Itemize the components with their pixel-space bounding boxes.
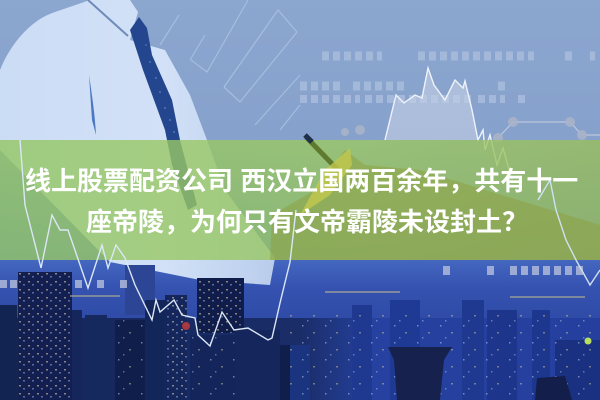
- olive shadow in band: [270, 150, 600, 260]
- title: 座帝陵，为何只有文帝霸陵未设封土？: [86, 207, 528, 237]
- small data squares: [0, 266, 583, 288]
- shirt fold: [89, 75, 96, 135]
- hand holding pen: [300, 135, 352, 215]
- necktie: [130, 17, 197, 210]
- translucent green title band: [0, 140, 600, 260]
- shirt collar shadow: [88, 0, 128, 36]
- mountain line chart: [385, 68, 478, 140]
- falling line chart: [20, 140, 296, 346]
- horizon lights: [70, 291, 585, 298]
- man's shirt: [0, 0, 275, 285]
- faint data rows: [300, 56, 595, 99]
- node line: [498, 122, 600, 138]
- green beacon light: [584, 338, 592, 344]
- title: [25, 166, 578, 237]
- red beacon light: [182, 322, 190, 330]
- faint chart outlines: [160, 0, 300, 130]
- city skyline: [0, 265, 600, 400]
- title: 线上股票配资公司 西汉立国两百余年，共有十一: [25, 166, 578, 196]
